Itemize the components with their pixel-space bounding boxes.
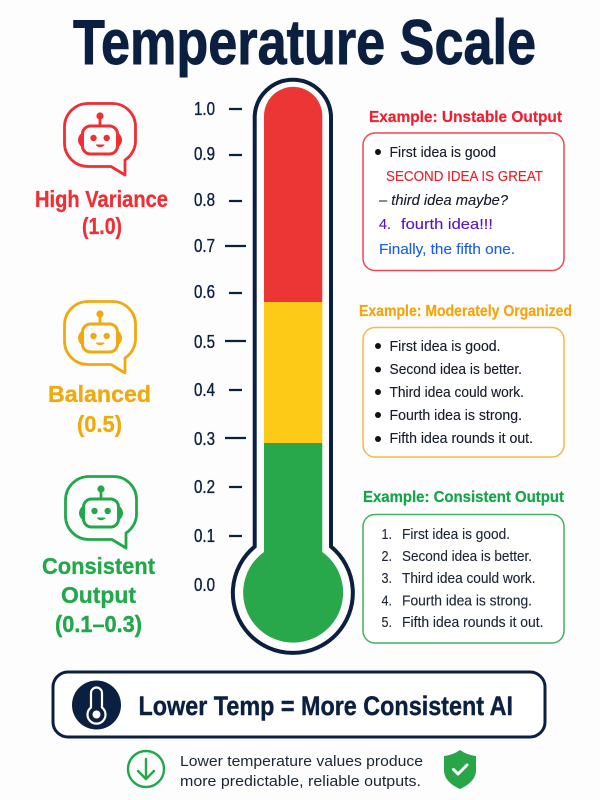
footnote text: Lower temperature values produce [180,753,423,770]
panel: moderately organized example [359,303,572,457]
icon: down arrow circle [128,751,164,787]
label: consistent: Consistent [42,553,155,579]
list: Fourth idea is strong. [390,408,522,424]
box [363,133,564,270]
panel: unstable example [363,109,564,270]
callout: lower temp banner [53,672,545,737]
list: First idea is good. [390,339,500,355]
thermometer [233,80,353,653]
list [375,339,533,447]
scale labels and ticks: 0.1 [194,526,215,546]
label: balanced: Balanced [48,381,151,407]
list: – third idea maybe? [378,193,509,209]
label: output: Output [61,582,136,608]
list: Fourth idea is strong. [402,594,532,610]
list: fourth idea!!! [401,217,493,233]
list: 4. [379,217,391,233]
panel: consistent example [363,489,565,643]
list: 3. [382,571,392,587]
footnote text: more predictable, reliable outputs. [180,773,421,790]
footnote text [180,753,423,790]
panel: balanced level [48,301,151,437]
icon: thermometer badge [72,680,121,730]
label: 0.1 to 0.3: (0.1–0.3) [55,611,142,637]
heading: Example: Unstable Output [369,109,563,126]
list: First idea is good. [402,527,510,543]
list [375,145,543,258]
box [363,514,564,643]
green section [243,443,343,643]
list: 1. [382,527,392,543]
banner text: Lower Temp = More Consistent AI [138,691,513,721]
scale labels and ticks: 0.9 [194,144,215,164]
heading: Example: Consistent Output [363,489,565,506]
list [382,527,544,631]
icon: yellow robot speech bubble [64,301,136,373]
scale labels and ticks: 0.5 [194,332,215,352]
list: Fifth idea rounds it out. [402,615,544,631]
scale labels and ticks: 0.6 [194,282,215,302]
scale labels and ticks: 0.8 [194,190,215,210]
label: 0.5: (0.5) [77,411,122,437]
list: Third idea could work. [402,571,536,587]
scale labels and ticks: 1.0 [194,99,215,119]
scale labels and ticks: 0.7 [194,236,215,256]
scale labels and ticks: 0.0 [194,575,215,595]
panel: high variance level [35,103,168,239]
list: 2. [382,549,392,565]
list: Fifth idea rounds it out. [390,431,533,447]
list: First idea is good [390,145,496,161]
list: SECOND IDEA IS GREAT [386,169,543,185]
label: 1.0: (1.0) [82,213,122,239]
yellow section [264,302,322,443]
scale labels and ticks: 0.2 [194,477,215,497]
list: Second idea is better. [402,549,532,565]
scale labels and ticks: 0.3 [194,429,215,449]
scale labels and ticks [194,99,246,595]
list: Finally, the fifth one. [379,242,515,258]
scale labels and ticks: 0.4 [194,380,215,400]
list: Third idea could work. [390,385,524,401]
label: high variance: High Variance [35,186,168,212]
box [363,328,564,457]
icon: green shield check [444,750,476,789]
heading: Example: Moderately Organized [359,303,572,320]
panel: consistent output level [42,476,155,637]
list: 5. [382,615,392,631]
thermometer outline [233,80,353,653]
list: 4. [382,594,392,610]
red section [264,87,322,302]
list: Second idea is better. [390,362,522,378]
icon: green robot speech bubble [66,476,137,548]
icon: red robot speech bubble [64,103,136,175]
